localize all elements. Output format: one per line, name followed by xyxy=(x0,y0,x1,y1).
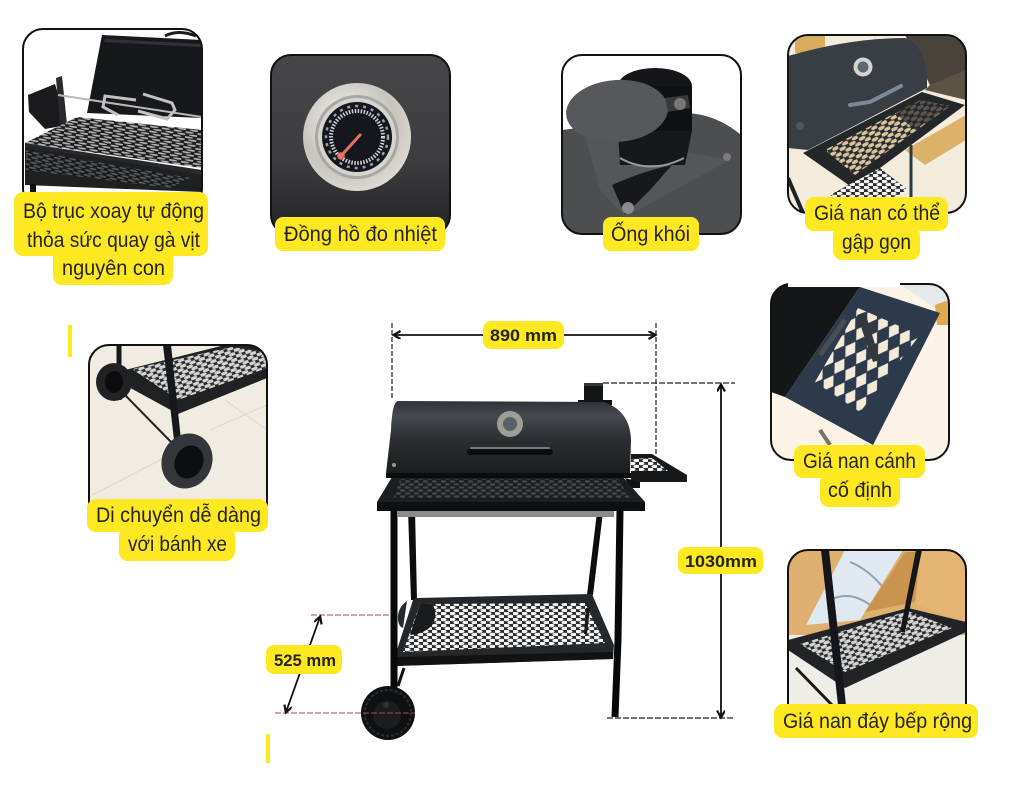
panel: bottom rack xyxy=(774,550,978,738)
panel: chimney xyxy=(562,55,741,251)
dimension: width 890 mm xyxy=(392,321,656,454)
front legs xyxy=(394,510,620,717)
dimension: height 1030 mm xyxy=(603,383,763,718)
dimension: height 1030 mm: 1030mm xyxy=(685,552,757,571)
back legs xyxy=(408,510,603,600)
back wheel xyxy=(398,601,407,628)
label: bottom rack xyxy=(774,704,978,738)
lower mesh shelf xyxy=(395,594,614,666)
decorative yellow fragment xyxy=(266,734,270,763)
decorative yellow fragment xyxy=(68,325,72,357)
panel: fixed side rack xyxy=(771,279,949,507)
label: folding rack: gập gọn xyxy=(842,231,911,254)
dimension: shelf height 525 mm xyxy=(266,615,415,713)
label: rotisserie: Bộ trục xoay tự động xyxy=(23,200,204,223)
label: fixed side rack: cố định xyxy=(828,479,892,502)
label: chimney xyxy=(603,217,699,251)
side shelf xyxy=(625,454,687,488)
label: folding rack xyxy=(805,197,948,260)
label: fixed side rack: Giá nan cánh xyxy=(803,450,916,473)
panel: rotisserie xyxy=(14,29,208,285)
label: thermometer: Đồng hồ đo nhiệt xyxy=(284,223,437,246)
label: fixed side rack xyxy=(794,445,925,507)
icon: gauge xyxy=(303,83,411,191)
label: wheels xyxy=(87,499,268,561)
label: thermometer xyxy=(275,217,445,251)
main product: grill xyxy=(361,383,687,740)
panel: thermometer xyxy=(271,55,450,251)
panel: folding rack xyxy=(788,35,966,260)
panel: wheels xyxy=(87,345,268,561)
label: bottom rack: Giá nan đáy bếp rộng xyxy=(783,710,972,733)
lid xyxy=(386,383,631,478)
label: chimney: Ống khói xyxy=(611,222,690,246)
label: rotisserie: nguyên con xyxy=(62,257,165,280)
label: wheels: Di chuyển dễ dàng xyxy=(96,504,261,527)
dimension: shelf height 525 mm: 525 mm xyxy=(274,651,336,670)
label: wheels: với bánh xe xyxy=(128,533,227,556)
cooking shelf xyxy=(377,477,645,517)
wheel xyxy=(361,686,415,740)
label: folding rack: Giá nan có thể xyxy=(814,202,940,225)
label: rotisserie xyxy=(14,192,208,285)
dimension: width 890 mm: 890 mm xyxy=(490,326,557,345)
label: rotisserie: thỏa sức quay gà vịt xyxy=(27,229,200,252)
